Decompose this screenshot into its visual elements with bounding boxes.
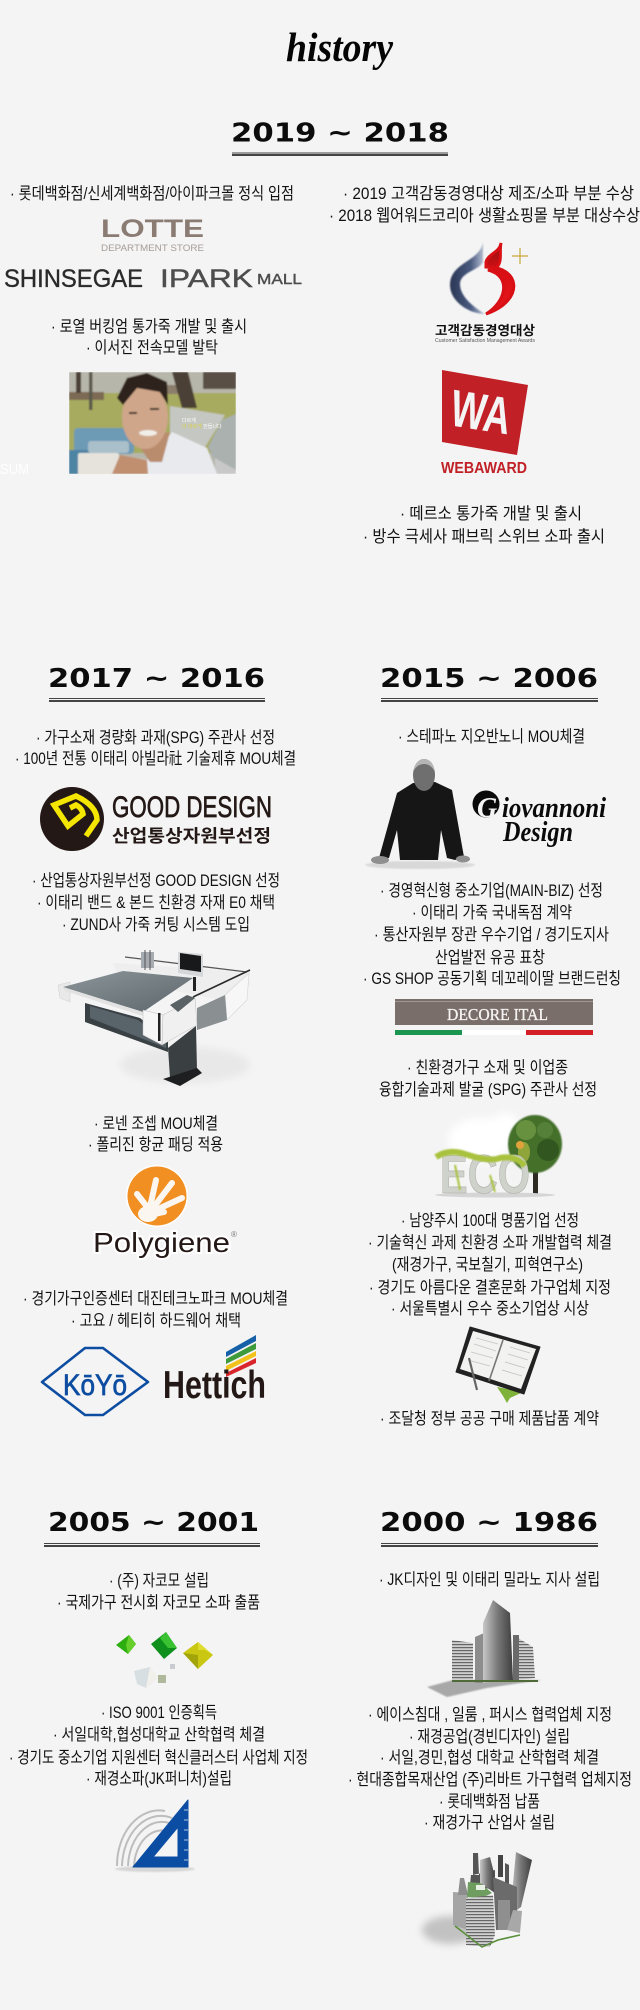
text block: certification and hardware: · 고요 / 헤티히 하드웨어 채택: [71, 1311, 241, 1330]
image: eco letters and tree: [435, 1113, 562, 1205]
text block: awards and contracts: · 이태리 가죽 국내독점 계약: [412, 903, 572, 922]
logo: hettich: [163, 1335, 266, 1407]
heading: 2015 ~ 2006: 2015 ~ 2006: [380, 664, 598, 694]
text block: research and MOU: · 100년 전통 이태리 아빌라社 기술제휴 MOU체결: [15, 749, 296, 768]
text block: awards and contracts: [363, 881, 621, 988]
logo: Ipark Mall: [160, 265, 302, 293]
logo: polygiene: [93, 1165, 237, 1258]
logo: Giovannoni Design: G: [477, 793, 497, 824]
text block: recognitions: · 서울특별시 우수 중소기업상 시상: [391, 1299, 589, 1318]
text block: certification and founding: · 서일대학,협성대학교 산학협력 체결: [53, 1725, 265, 1744]
panel: 2000-1986: [348, 1508, 632, 1947]
text block: sofa launch: · 방수 극세사 패브릭 스위브 소파 출시: [363, 527, 605, 546]
text block: MOU and padding: · 폴리진 항균 패딩 적용: [88, 1135, 223, 1154]
text block: MOU and padding: [88, 1114, 223, 1154]
image: city block of towers: [422, 1852, 532, 1947]
text block: awards and contracts: 산업발전 유공 표창: [435, 948, 545, 967]
text block: research and MOU: [15, 728, 296, 768]
text: government procurement contract: · 조달청 정부 공공 구매 제품납품 계약: [380, 1409, 599, 1428]
text block: founding: [57, 1571, 260, 1612]
caption: sum: SUM: [0, 461, 29, 478]
text block: founding: · (주) 자코모 설립: [109, 1571, 209, 1590]
title: history: [286, 24, 394, 70]
panel: 2005-2001: [9, 1508, 308, 1872]
logo: Shinsegae: SHINSEGAE: [4, 265, 143, 293]
logo: koyo: [42, 1348, 148, 1415]
text block: good design and materials: · ZUND사 가죽 커팅 시스템 도입: [62, 915, 250, 934]
text: branch founding: · JK디자인 및 이태리 밀라노 지사 설립: [379, 1570, 600, 1589]
logo: good design: 산업통상자원부선정: [112, 826, 271, 846]
logo: Lotte department store: DEPARTMENT STORE: [101, 243, 204, 254]
photo: brand model on sofa: 다르게: [182, 417, 196, 424]
text block: model and product launch: · 로열 버킹엄 통가죽 개발 및 출시: [51, 317, 247, 336]
logo: web award: [441, 370, 528, 477]
text block: partners and founding: · 롯데백화점 납품: [439, 1792, 540, 1811]
icon: colored cubes: [116, 1632, 213, 1688]
logo: Decore Ital: [395, 999, 593, 1035]
text block: awards: [329, 184, 640, 225]
text block: certification and founding: · 재경소파(JK퍼니처)설립: [86, 1769, 232, 1788]
logo: customer satisfaction award: 고객감동경영대상: [435, 323, 535, 338]
image: eco letters and tree: ECO: [440, 1143, 530, 1205]
logo: Decore Ital: DECORE ITAL: [447, 1005, 548, 1024]
logo: Giovannoni Design: [472, 790, 606, 848]
logo: good design: [40, 787, 272, 851]
text block: certification and hardware: · 경기가구인증센터 대진테크노파크 MOU체결: [23, 1289, 288, 1308]
logo: polygiene: ®: [231, 1230, 237, 1239]
logo: web award: WA: [447, 380, 515, 446]
logo: polygiene: Polygiene: [93, 1227, 230, 1258]
logo: Giovannoni Design: iovannoni: [502, 792, 606, 824]
image: leather cutting machine: [58, 950, 250, 1086]
logo: web award: WEBAWARD: [441, 460, 527, 477]
text block: partners and founding: · 재경공업(경빈디자인) 설립: [409, 1727, 570, 1746]
text block: partners and founding: · 서일,경민,협성 대학교 산학협력 체결: [380, 1748, 599, 1767]
text block: partners and founding: [348, 1705, 632, 1832]
logo: customer satisfaction award: [435, 242, 536, 344]
text block: eco project: 융합기술과제 발굴 (SPG) 주관사 선정: [379, 1080, 597, 1099]
logo: koyo: KōYō: [63, 1369, 127, 1402]
text block: MOU and padding: · 로넨 조셉 MOU체결: [94, 1114, 218, 1133]
image: office buildings: [427, 1600, 542, 1697]
text block: recognitions: [368, 1211, 612, 1318]
logo: hettich: Hettich: [163, 1364, 266, 1407]
logo: Ipark Mall: MALL: [257, 271, 302, 288]
text block: research and MOU: · 가구소재 경량화 과재(SPG) 주관사 선정: [36, 728, 275, 747]
text block: recognitions: (재경가구, 국보칠기, 피혁연구소): [392, 1255, 583, 1274]
text block: eco project: [379, 1058, 597, 1099]
logo: Lotte department store: [101, 215, 204, 254]
text block: certification and hardware: [23, 1289, 288, 1330]
panel: 2015-2006: [363, 664, 621, 1428]
text block: partners and founding: · 재경가구 산업사 설립: [424, 1813, 555, 1832]
icon: notebook and pen: [456, 1327, 540, 1403]
text block: model and product launch: · 이서진 전속모델 발탁: [86, 338, 218, 357]
text block: model and product launch: [51, 317, 247, 357]
text block: sofa launch: [363, 504, 605, 546]
text block: eco project: · 친환경가구 소재 및 이업종: [407, 1058, 568, 1077]
heading: 2005 ~ 2001: 2005 ~ 2001: [48, 1508, 259, 1538]
text block: good design and materials: [32, 871, 280, 934]
image: Stefano Giovannoni portrait: [365, 759, 475, 869]
text block: founding: · 국제가구 전시회 자코모 소파 출품: [57, 1593, 260, 1612]
heading: 2000 ~ 1986: 2000 ~ 1986: [380, 1508, 598, 1538]
heading: 2017 ~ 2016: 2017 ~ 2016: [48, 664, 265, 694]
text block: certification and founding: · 경기도 중소기업 지원센터 혁신클러스터 사업체 지정: [9, 1748, 308, 1767]
text block: certification and founding: [9, 1703, 308, 1788]
logo: Giovannoni Design: Design: [502, 816, 573, 848]
logo: Ipark Mall: IPARK: [160, 265, 253, 293]
text block: sofa launch: · 떼르소 통가죽 개발 및 출시: [400, 504, 582, 523]
logo: Lotte department store: LOTTE: [101, 215, 204, 243]
text block: recognitions: · 남양주시 100대 명품기업 선정: [401, 1211, 579, 1230]
text block: good design and materials: · 이태리 밴드 & 본드 친환경 자재 E0 채택: [37, 893, 275, 912]
text: Giovannoni MOU: · 스테파노 지오반노니 MOU체결: [398, 727, 585, 746]
panel: 2019-2018: [0, 118, 640, 546]
text block: certification and founding: · ISO 9001 인증획득: [101, 1703, 217, 1722]
panel: 2017-2016: [15, 664, 296, 1415]
logo: customer satisfaction award: Customer Satisfaction Management Awards: [435, 338, 536, 344]
photo: brand model on sofa: [69, 372, 236, 475]
logo: good design: GOOD DESIGN: [112, 791, 272, 824]
heading: 2019 ~ 2018: 2019 ~ 2018: [231, 118, 449, 148]
icon: set square and arcs: [115, 1800, 195, 1872]
photo: brand model on sofa: 더 바르게 만듭니다: [182, 423, 222, 430]
text block: good design and materials: · 산업통상자원부선정 GOOD DESIGN 선정: [32, 871, 280, 890]
text: department store entry: · 롯데백화점/신세계백화점/아이파크몰 정식 입점: [10, 184, 294, 203]
